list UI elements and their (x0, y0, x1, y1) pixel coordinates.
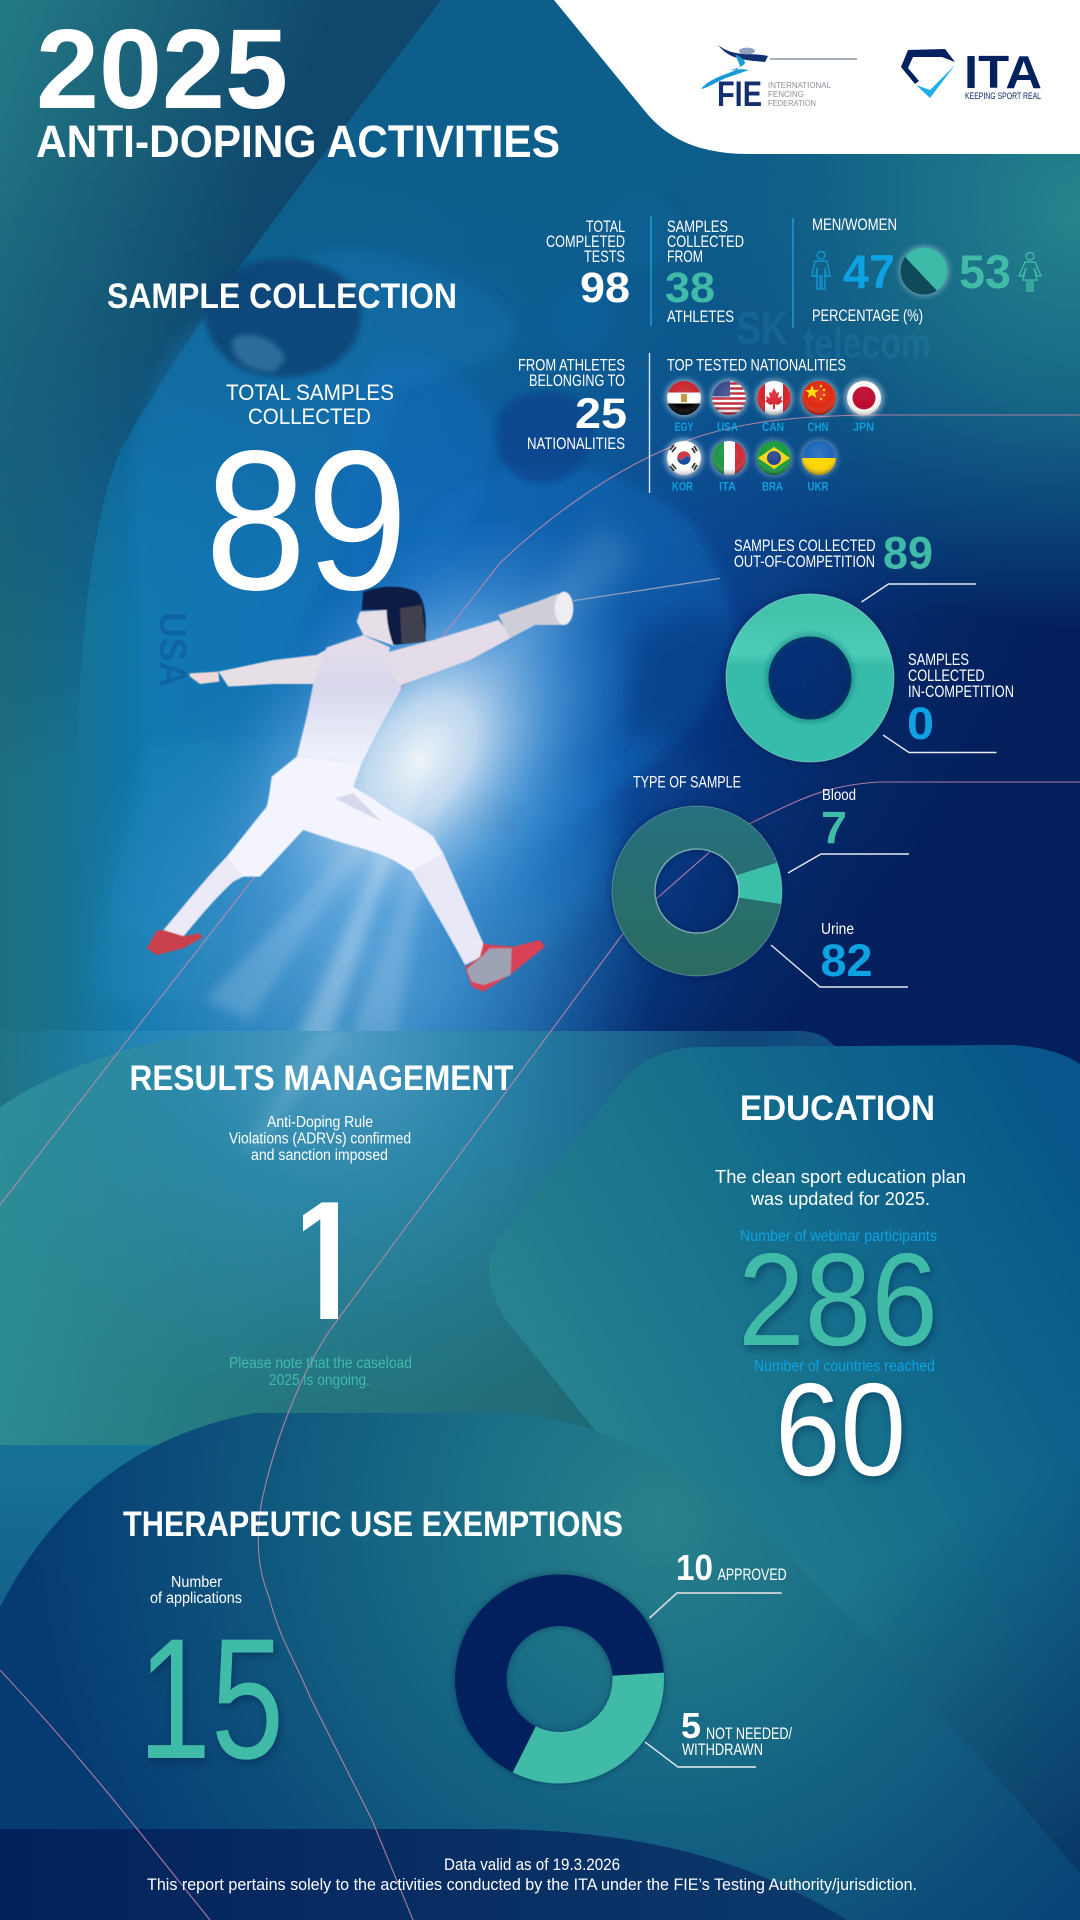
results description: and sanction imposed (251, 1147, 388, 1164)
fencing mask (357, 587, 426, 646)
caseload note: 2025 is ongoing. (269, 1372, 370, 1389)
panel: education background (489, 1045, 1080, 1920)
in-competition label: IN-COMPETITION (908, 682, 1014, 701)
out-of-competition label: SAMPLES COLLECTED (734, 536, 876, 555)
education description: The clean sport education plan (715, 1167, 966, 1187)
stat: men and women percentage: 53 (959, 245, 1011, 298)
applications label: of applications (150, 1590, 242, 1607)
education description: was updated for 2025. (750, 1189, 930, 1209)
flag: Italy (710, 440, 748, 476)
big number: ADRVs: 1 (270, 1160, 381, 1383)
stat: total completed tests (546, 217, 630, 312)
top tested nationalities: USA (717, 420, 738, 434)
flag: Japan (845, 379, 883, 417)
background photo: athletes in duotone (108, 250, 929, 935)
in-competition label: SAMPLES (908, 650, 969, 669)
stat: men and women percentage: MEN/WOMEN (812, 215, 897, 234)
logo: FIE (701, 45, 857, 114)
approved label: 10 (676, 1547, 713, 1588)
front arm and glove (383, 592, 573, 686)
top tested nationalities: UKR (808, 480, 829, 494)
footer note: Data valid as of 19.3.2026 (444, 1856, 620, 1874)
blood segment (736, 862, 782, 904)
out-of-competition label: 89 (883, 528, 933, 578)
stat: men and women percentage: PERCENTAGE (%) (812, 306, 923, 325)
approved label: APPROVED (718, 1566, 787, 1584)
stat: total completed tests: TOTAL (586, 217, 625, 236)
title (36, 6, 560, 167)
stat: samples collected from athletes: 38 (665, 264, 715, 312)
urine segment (612, 806, 781, 976)
right shoe (465, 940, 545, 992)
divider (650, 216, 652, 326)
stat: samples collected from athletes: SAMPLES (667, 217, 728, 236)
not needed label: NOT NEEDED/ (706, 1725, 792, 1743)
sponsor board text (738, 312, 929, 358)
results description: Anti-Doping Rule (267, 1114, 373, 1131)
sponsor board text: telecom (803, 319, 931, 368)
stat: men and women percentage (812, 215, 1041, 325)
stat: nationalities: 25 (575, 390, 627, 438)
top tested nationalities: KOR (672, 480, 693, 494)
logo: FIE: FEDERATION (768, 98, 816, 108)
urine label: Urine (821, 921, 854, 938)
stat: total completed tests: 98 (580, 264, 630, 312)
light burst behind fencer (126, 524, 637, 1031)
title: 2025 (36, 6, 288, 132)
icon: woman (1019, 252, 1041, 291)
flag: China (800, 380, 838, 416)
in-competition label: 0 (907, 698, 934, 749)
fencer body (147, 587, 573, 992)
total samples collected: COLLECTED (248, 404, 371, 429)
stat: countries reached: 60 (775, 1356, 906, 1503)
stat: webinar participants: Number of webinar participants (740, 1228, 937, 1245)
stat: countries reached: Number of countries reached (754, 1358, 935, 1375)
urine label (771, 921, 908, 987)
applications label: Number (171, 1574, 222, 1591)
top tested nationalities: CAN (762, 420, 784, 434)
approved label (650, 1547, 787, 1618)
left shoe (147, 930, 203, 955)
stat: nationalities: BELONGING TO (529, 371, 625, 390)
back leg (163, 855, 263, 937)
stat: nationalities: NATIONALITIES (527, 434, 625, 453)
logo: FIE: FENCING (768, 89, 804, 99)
flag: Korea (665, 439, 703, 477)
divider (648, 353, 650, 493)
stat: samples collected from athletes: COLLECTED (667, 232, 744, 251)
light burst over results panel (0, 1031, 730, 1431)
big number: applications: 15 (138, 1603, 284, 1795)
approved segment (455, 1574, 664, 1772)
left background fencer (108, 250, 512, 932)
jacket torso (297, 635, 402, 763)
background layers (0, 0, 1080, 1107)
flag: Brazil (756, 440, 792, 476)
logo: FIE: FIE (717, 75, 762, 114)
stat: samples collected from athletes (665, 217, 744, 326)
pink accent curves (0, 415, 1080, 1920)
total samples collected: 89 (205, 410, 408, 632)
flag: Ukraine (800, 440, 838, 476)
applications label (150, 1574, 242, 1607)
panel: footer band (0, 1829, 847, 1920)
top tested nationalities: JPN (853, 420, 874, 434)
panel: results management background (0, 1031, 850, 1500)
crowd shapes (359, 294, 606, 520)
type of sample label: TYPE OF SAMPLE (633, 772, 741, 792)
urine label: 82 (820, 935, 872, 986)
top tested nationalities (665, 356, 883, 494)
out-of-competition label (734, 528, 976, 602)
caseload note: Please note that the caseload (229, 1355, 412, 1372)
education description (715, 1167, 966, 1209)
flag: Canada (756, 380, 792, 416)
results panel upper right blue tint (400, 1031, 850, 1400)
out-of-competition label: OUT-OF-COMPETITION (734, 552, 875, 571)
flag: USA (710, 380, 748, 416)
stat: samples collected from athletes: ATHLETES (667, 307, 734, 326)
top tested nationalities: CHN (808, 420, 828, 434)
in-competition label (883, 650, 1014, 752)
right background fencer (460, 391, 730, 935)
results description: Violations (ADRVs) confirmed (229, 1130, 411, 1148)
not needed label (645, 1705, 792, 1767)
stat: webinar participants: 286 (738, 1226, 938, 1373)
top tested nationalities: EGY (674, 420, 694, 434)
top tested nationalities: TOP TESTED NATIONALITIES (667, 356, 846, 374)
mini pie men versus women (899, 240, 960, 296)
footer note (147, 1856, 917, 1894)
front leg (412, 853, 483, 965)
panel: therapeutic use exemptions layers (0, 1400, 1080, 1920)
heading: therapeutic use exemptions: THERAPEUTIC USE EXEMPTIONS (123, 1505, 623, 1544)
heading: sample collection: SAMPLE COLLECTION (107, 277, 457, 316)
flag: Egypt (666, 380, 702, 416)
back arm and hand (189, 647, 330, 687)
not needed or withdrawn segment (513, 1673, 664, 1783)
not needed label: WITHDRAWN (682, 1741, 763, 1759)
stat: men and women percentage: 47 (843, 245, 895, 298)
footer note: This report pertains solely to the activities conducted by the ITA under the FIE’s Testing Authority/jurisdiction. (147, 1876, 917, 1894)
stat: nationalities: FROM ATHLETES (518, 356, 625, 374)
fencer athlete (147, 578, 720, 992)
donut chart: TUE applications (455, 1574, 664, 1783)
divider (792, 218, 794, 328)
stat: total completed tests: TESTS (584, 247, 625, 266)
stat: nationalities (518, 356, 627, 453)
total samples collected: TOTAL SAMPLES (226, 380, 394, 405)
top tested nationalities: ITA (719, 480, 736, 494)
logo: ITA: KEEPING SPORT REAL (965, 91, 1041, 101)
stat: samples collected from athletes: FROM (667, 247, 703, 266)
logo panel (554, 0, 1080, 154)
left background fencer: USA (151, 612, 193, 687)
logo: FIE: INTERNATIONAL (768, 80, 831, 90)
donut chart: out-of-competition versus in-competition (726, 594, 894, 762)
blood label (788, 787, 909, 873)
top tested nationalities: BRA (762, 480, 783, 494)
heading: education: EDUCATION (740, 1089, 935, 1128)
icon: man (812, 252, 830, 289)
caseload note (229, 1355, 412, 1389)
logo: ITA (901, 46, 1042, 101)
heading: results management: RESULTS MANAGEMENT (130, 1059, 514, 1098)
title: ANTI-DOPING ACTIVITIES (36, 116, 560, 167)
stat: total completed tests: COMPLETED (546, 232, 625, 251)
sword blade (573, 578, 720, 601)
blood label: Blood (822, 787, 856, 804)
blood label: 7 (821, 802, 847, 853)
donut chart: type of sample (612, 806, 782, 976)
results description (229, 1114, 411, 1164)
sponsor board text: SK (736, 302, 788, 354)
in-competition label: COLLECTED (908, 666, 985, 685)
not needed label: 5 (681, 1705, 701, 1746)
trousers (227, 757, 443, 877)
logo: ITA: ITA (964, 46, 1042, 98)
